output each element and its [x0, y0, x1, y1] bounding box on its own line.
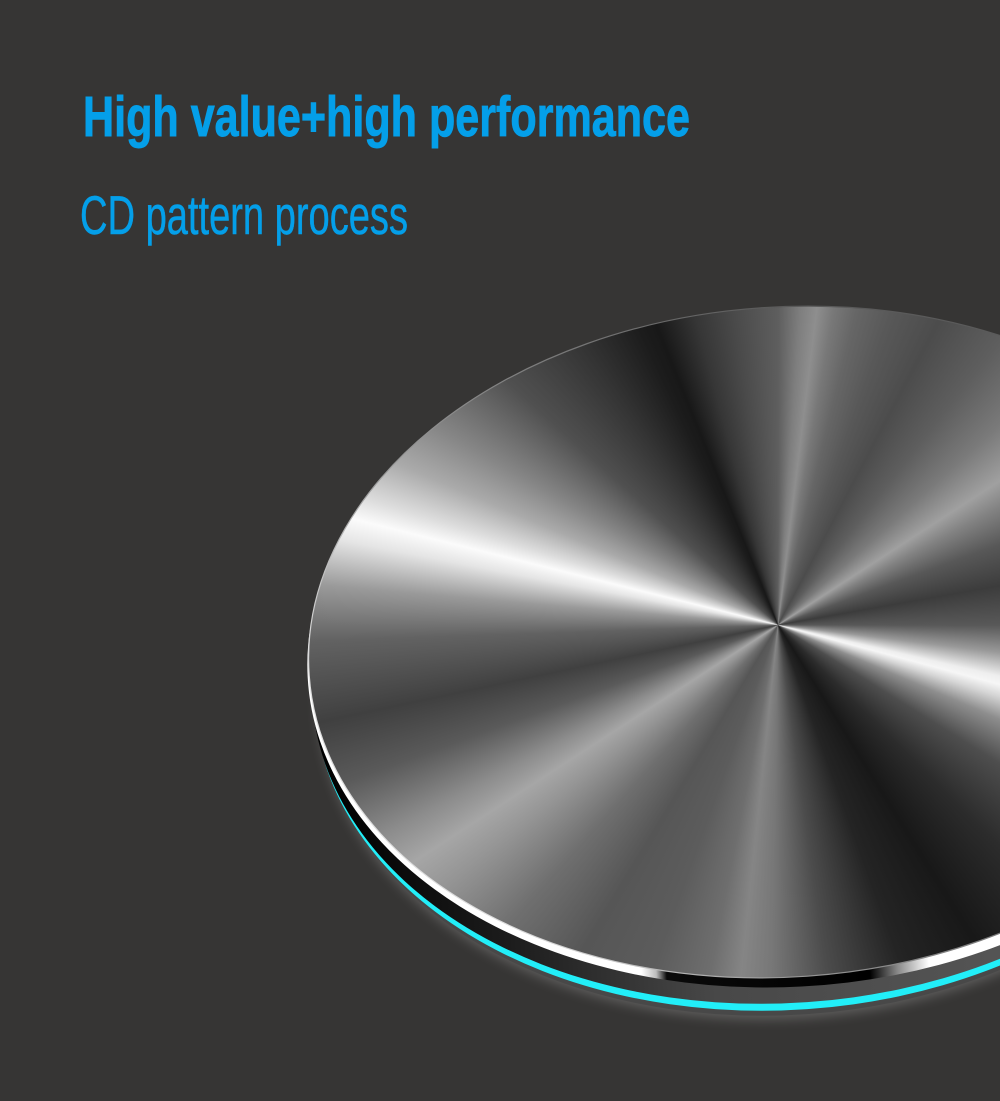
product: metal wireless charger disc [307, 306, 1000, 1024]
disc face with radial CD pattern [309, 306, 1000, 978]
grey shadow band outside the light ring [294, 311, 1000, 1047]
cyan light ring [291, 306, 1000, 1042]
dark underside band [289, 301, 1000, 1035]
soft glow under the disc [296, 314, 1000, 1050]
polished rim [290, 292, 1000, 1012]
subtitle: CD pattern process: CD pattern process [80, 184, 408, 246]
title: high value high performance: High value+high performance [83, 85, 690, 149]
disc edge highlight [286, 275, 1000, 1009]
